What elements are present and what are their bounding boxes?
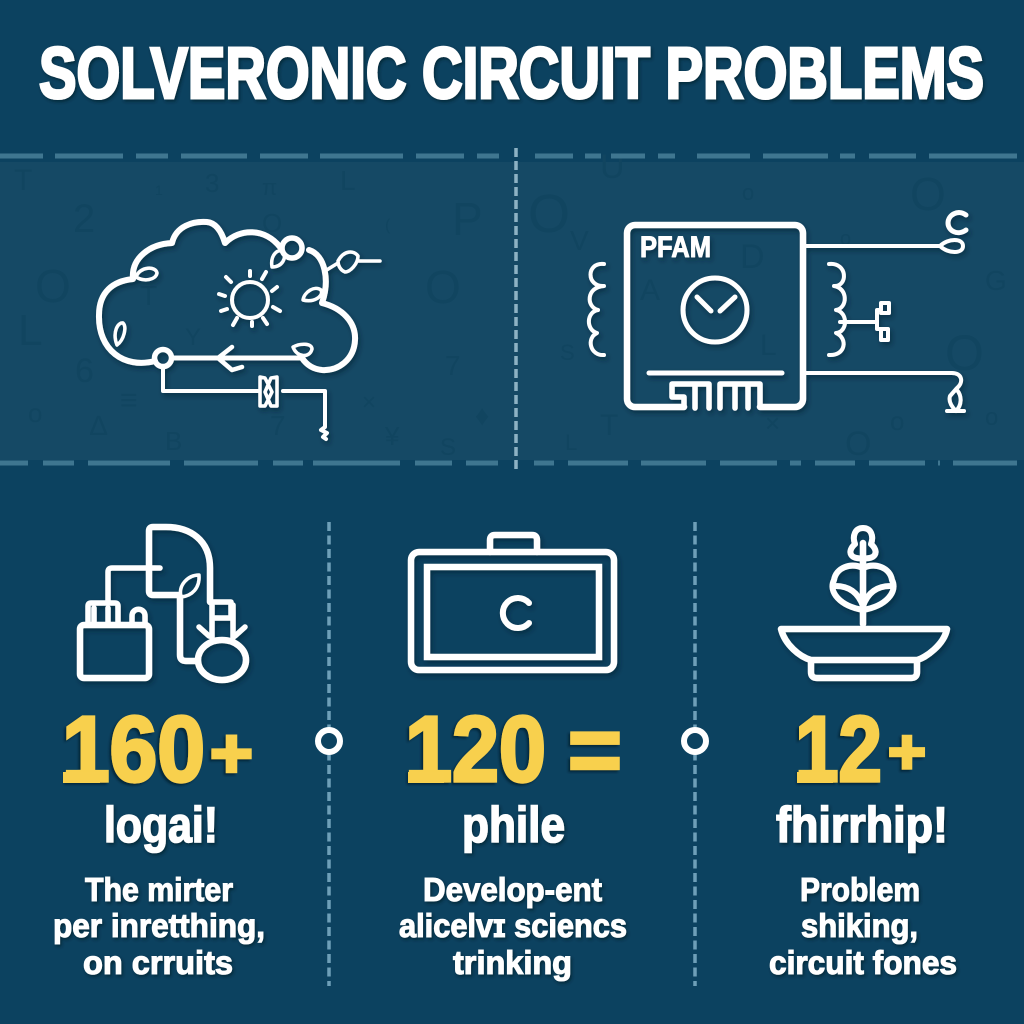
panel: background symbols: T xyxy=(14,164,32,197)
panel: background symbols: O xyxy=(425,261,461,313)
panel: background symbols: O xyxy=(35,260,71,312)
number: 12+: 12 xyxy=(795,697,882,801)
panel: background symbols: B xyxy=(165,426,182,456)
panel: background symbols: O xyxy=(262,208,282,238)
separator 2 xyxy=(684,522,706,986)
panel: background symbols: Y xyxy=(185,324,201,351)
panel: background symbols: 1 xyxy=(155,182,163,198)
panel: background symbols: S xyxy=(560,340,575,365)
panel: background symbols: D xyxy=(740,238,765,276)
panel: background symbols: G xyxy=(985,265,1007,296)
separator 1 xyxy=(318,522,340,986)
panel band background xyxy=(0,162,1024,460)
panel: background symbols: O xyxy=(845,425,871,463)
icon: switch component xyxy=(260,377,277,406)
icon: plant bowl xyxy=(781,528,947,678)
panel: background symbols: × xyxy=(362,389,376,416)
heading: logai!: logai! xyxy=(104,797,218,853)
panel: background symbols: L xyxy=(565,430,577,455)
panel: background symbols: P xyxy=(452,193,483,245)
icon: lab apparatus xyxy=(80,527,246,680)
panel: background symbols: × xyxy=(765,408,780,438)
panel: background symbols: S xyxy=(440,434,456,461)
chip label: PFAM xyxy=(640,231,711,264)
stat column 2 xyxy=(399,697,627,981)
description: alicelvɪ sciencs xyxy=(399,907,627,944)
panel: background symbols: O xyxy=(528,184,570,244)
panel: background symbols: 7 xyxy=(445,350,461,381)
number: 160+: 160 xyxy=(62,697,205,801)
icon: clock xyxy=(683,278,747,342)
panel: background symbols: O xyxy=(945,325,984,381)
panel: background symbols: ¥ xyxy=(384,421,400,451)
panel: background symbols: V xyxy=(570,225,589,256)
panel: background symbols: ≡ xyxy=(120,384,138,417)
panel: background symbols: 6 xyxy=(75,352,94,390)
panel: background symbols: ( xyxy=(385,217,391,234)
panel: background symbols: U xyxy=(600,148,625,186)
panel: background symbols: T xyxy=(140,280,157,311)
description xyxy=(399,871,627,981)
description: Problem xyxy=(800,871,920,908)
panel: background symbols: ∆ xyxy=(90,410,108,441)
panel: background symbols: L xyxy=(18,306,42,355)
number: 120 =: 120 xyxy=(405,697,546,801)
panel: background symbols: L xyxy=(340,165,356,196)
description: trinking xyxy=(453,944,572,981)
panel: background symbols: o xyxy=(890,406,904,436)
panel: background symbols: A xyxy=(640,274,660,307)
panel: background symbols: o xyxy=(742,180,754,205)
panel: background symbols: 2 xyxy=(73,197,95,241)
panel: background symbols: 7 xyxy=(270,410,286,441)
panel: background symbols: o xyxy=(840,228,851,250)
description: per inretthing, xyxy=(53,907,265,944)
description: shiking, xyxy=(801,907,918,944)
dashed panel borders xyxy=(0,156,1017,463)
number: 120 =: = xyxy=(568,697,622,802)
panel: background symbols: 3 xyxy=(205,168,219,198)
panel: background symbols: L xyxy=(760,329,777,362)
number: 12+: + xyxy=(888,718,926,787)
icon: sun gear xyxy=(219,271,280,326)
icon: PFAM chip circuit xyxy=(589,213,966,411)
panel: background symbols: π xyxy=(262,175,277,200)
description xyxy=(53,871,265,981)
stat column 3 xyxy=(769,697,957,981)
number: 160+: + xyxy=(210,714,253,792)
panel: background symbols xyxy=(14,148,1007,463)
icon: battery case xyxy=(411,535,614,670)
description xyxy=(769,871,957,981)
description: circuit fones xyxy=(769,944,957,981)
description: Develop-ent xyxy=(423,871,602,908)
heading: phile: phile xyxy=(462,797,565,853)
description: on crruits xyxy=(83,944,233,981)
panel: background symbols: ♦ xyxy=(475,400,489,431)
panel: background symbols: o xyxy=(28,398,42,428)
panel: background symbols: O xyxy=(910,168,946,220)
heading: fhirrhip!: fhirrhip! xyxy=(776,797,948,853)
panel: background symbols: T xyxy=(600,409,618,442)
stat column 1 xyxy=(53,697,265,981)
description: The mirter xyxy=(85,871,233,908)
panel: background symbols: o xyxy=(985,404,998,431)
icon: cloud circuit xyxy=(99,222,380,439)
